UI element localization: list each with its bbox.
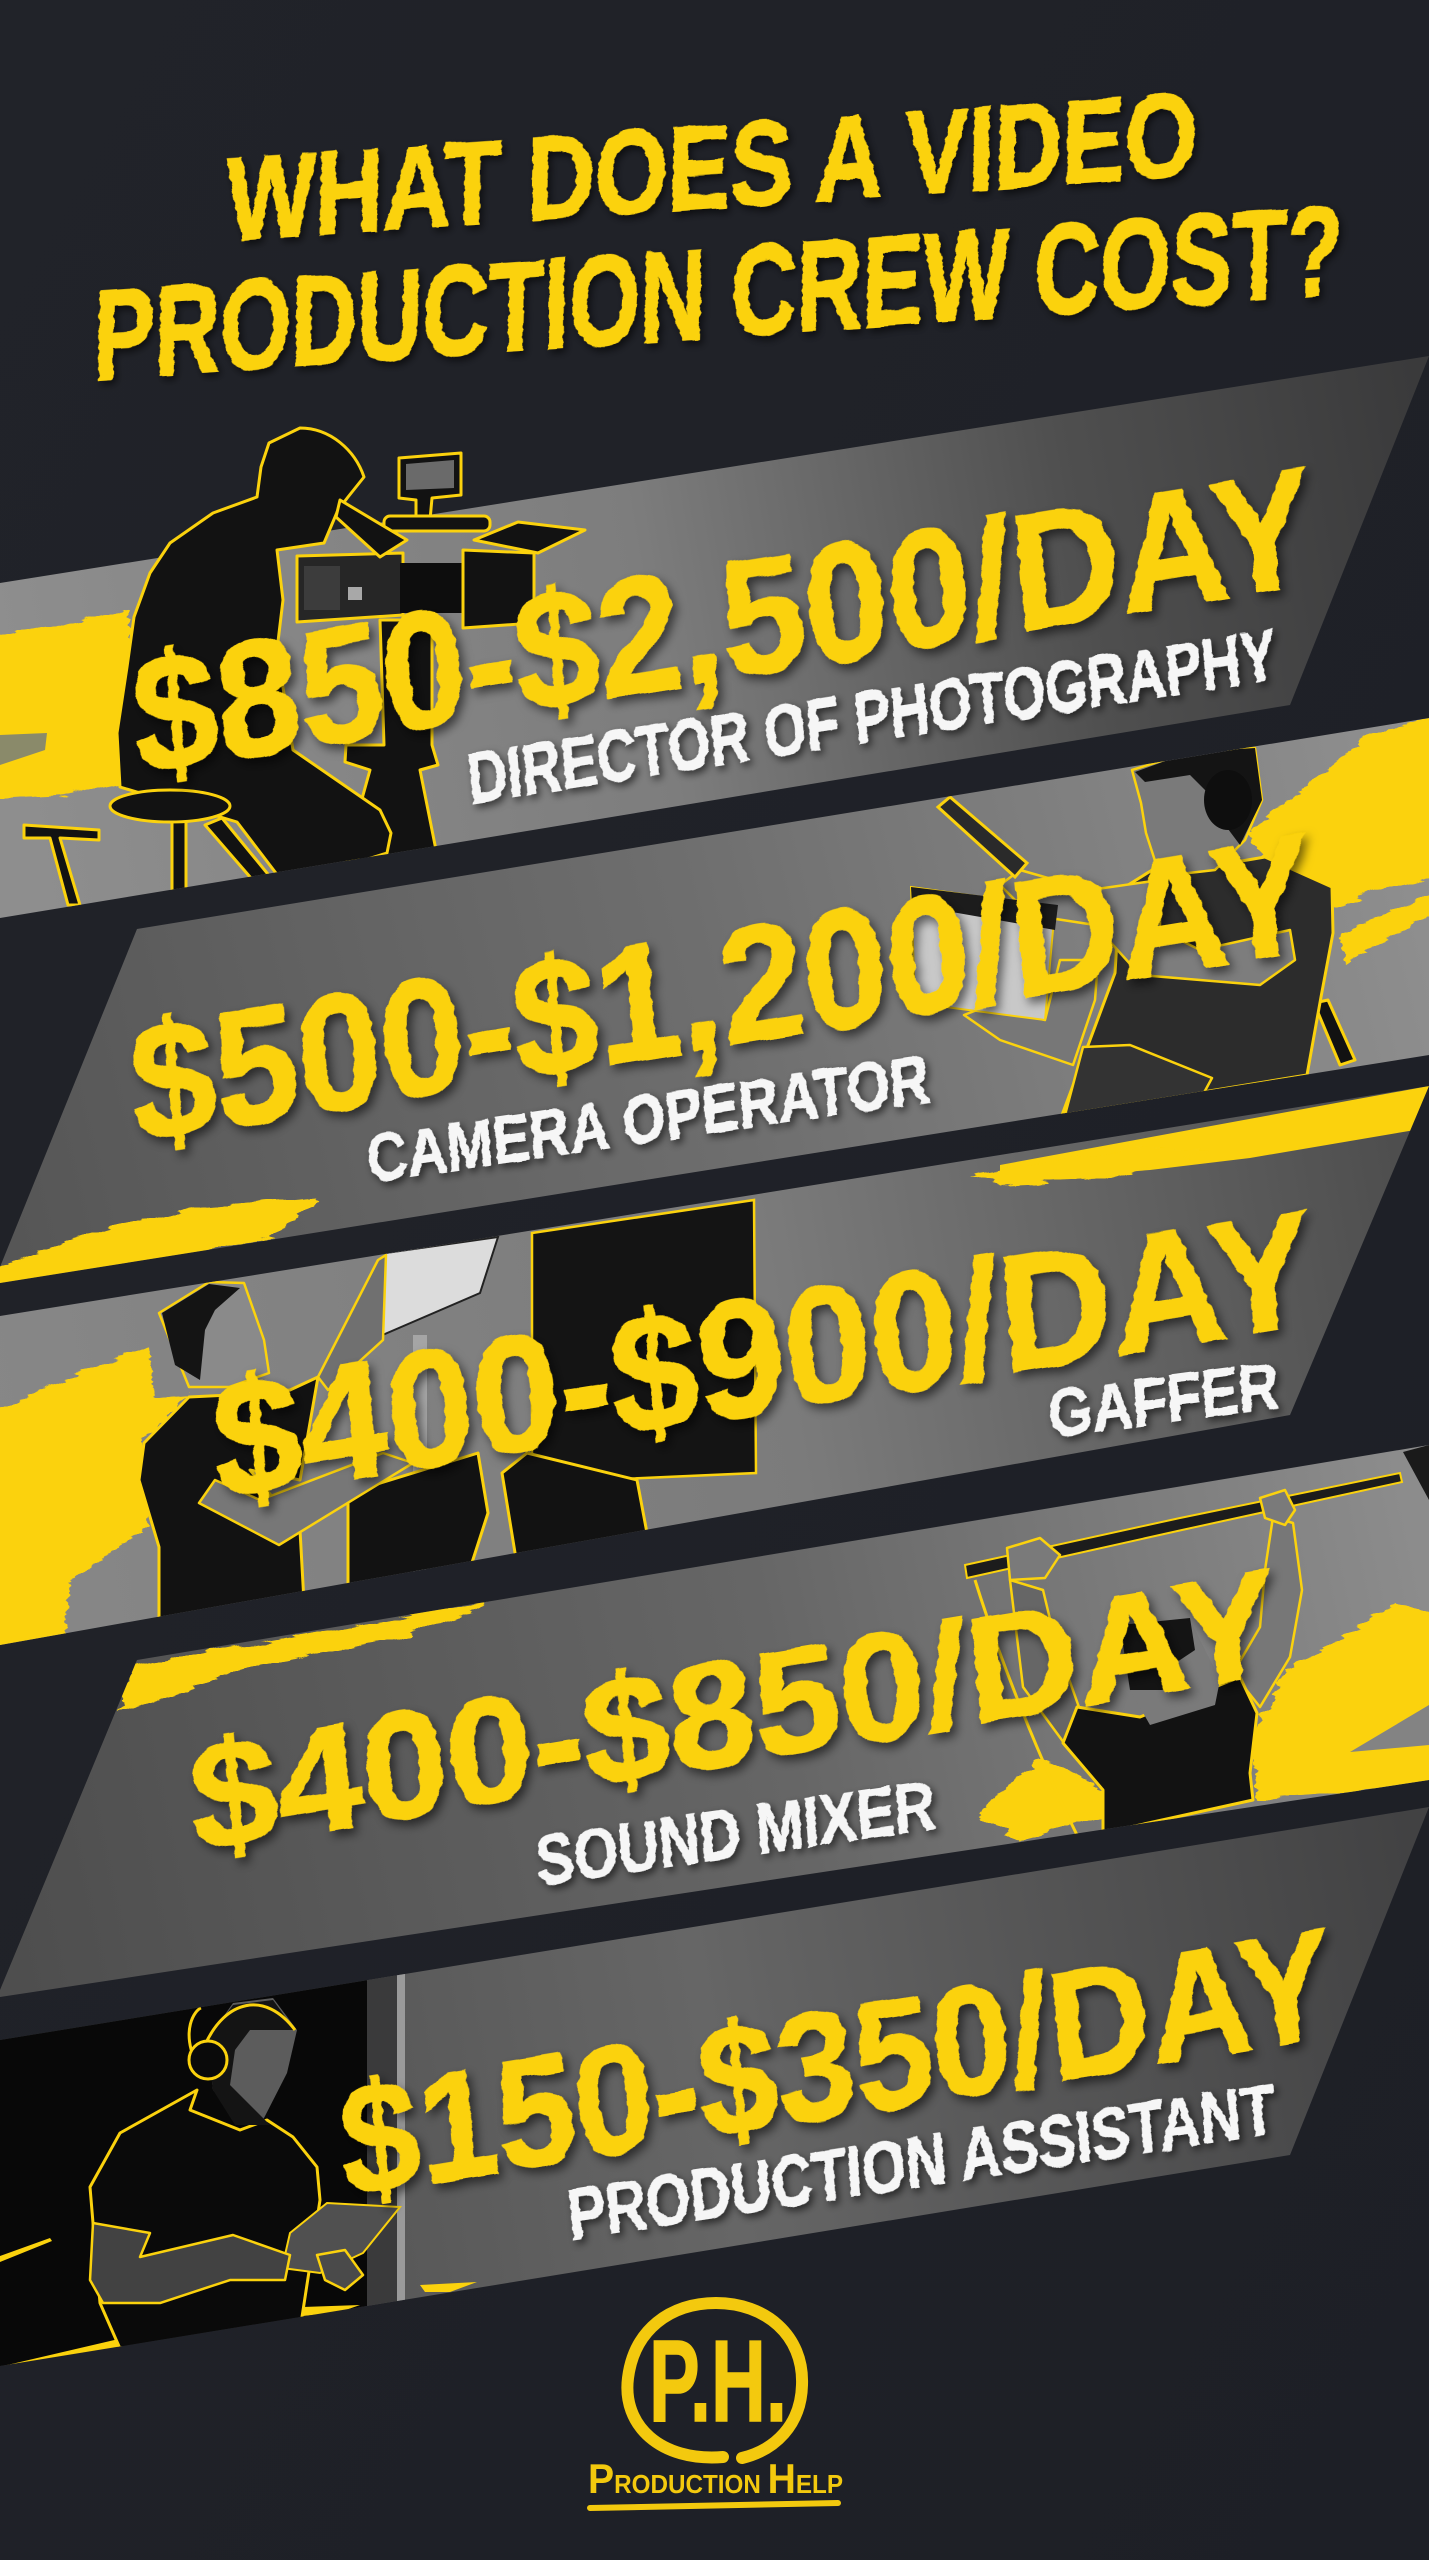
boom pole: [965, 1473, 1402, 1578]
logo ring: [627, 2303, 802, 2458]
yellow brush strokes: [0, 1086, 1429, 1650]
crew member 2: [348, 1453, 488, 1600]
operator silhouette: [117, 428, 391, 885]
yellow brush flecks: [0, 2238, 477, 2368]
top handle: [384, 516, 490, 531]
monitor: [399, 453, 461, 520]
black flag: [532, 1200, 756, 1483]
cable: [975, 1580, 1077, 1835]
panel: camera operator: [0, 712, 1429, 1290]
price: $400-$900/DAY: [206, 1175, 1321, 1536]
torso: [1063, 1677, 1257, 1833]
price: $850-$2,500/DAY: [125, 434, 1321, 811]
headphones: [1204, 770, 1252, 830]
microphone: [1403, 1445, 1429, 1500]
panel: gaffer: [0, 1086, 1429, 1650]
viewfinder: [336, 500, 407, 557]
headphones: [189, 2005, 295, 2079]
role label: SOUND MIXER: [533, 1766, 938, 1901]
right hand: [317, 2250, 363, 2290]
equipment bag: [1065, 1045, 1212, 1115]
hair: [162, 1284, 240, 1380]
title line 1: WHAT DOES A VIDEO: [225, 69, 1199, 267]
yellow brush stroke: [0, 608, 130, 800]
torso: [90, 2090, 320, 2360]
price: $500-$1,200/DAY: [123, 800, 1320, 1179]
lower arm and slate: [911, 797, 1098, 1065]
price: $400-$850/DAY: [183, 1538, 1284, 1884]
head: [1132, 748, 1262, 875]
panel background: [0, 356, 1429, 918]
logo wordmark: PRODUCTION HELP: [588, 2455, 843, 2502]
panel: production assistant: [0, 1807, 1429, 2380]
matte box: [463, 522, 585, 628]
price: $150-$350/DAY: [333, 1896, 1339, 2230]
forearm: [1000, 870, 1295, 985]
role label: CAMERA OPERATOR: [364, 1040, 932, 1198]
role label: GAFFER: [1046, 1347, 1281, 1453]
logo underline: [590, 2503, 838, 2508]
gaffer torso: [139, 1377, 318, 1640]
photo: gaffer with softbox: [139, 1200, 756, 1640]
dark backdrop: [0, 1960, 405, 2380]
stand: [413, 1335, 427, 1580]
panel: sound mixer: [0, 1445, 1429, 1997]
panel background: [0, 718, 1429, 1283]
photo: operator with slate: [911, 748, 1355, 1115]
camera body: [297, 553, 403, 622]
raised arm: [318, 1255, 386, 1390]
right arm: [1233, 1517, 1302, 1707]
panel background: [0, 1445, 1429, 1997]
forearm: [199, 1453, 413, 1545]
yellow brush strokes: [120, 1600, 1429, 1840]
hair: [1135, 748, 1262, 845]
head: [207, 1998, 297, 2125]
photo: assistant with tablet: [90, 1998, 400, 2360]
light stand: [24, 825, 99, 905]
hands: [1007, 1490, 1295, 1580]
logo initials: P.H.: [649, 2316, 787, 2446]
panel background: [0, 1807, 1429, 2366]
title: [92, 69, 1344, 408]
lens: [400, 563, 468, 613]
head: [1120, 1618, 1220, 1725]
strap bar: [1314, 1000, 1355, 1065]
left arm: [1010, 1580, 1080, 1747]
softbox: [378, 1237, 498, 1337]
crew member 3: [502, 1453, 647, 1565]
photo: camera operator seated: [24, 428, 585, 905]
forearm: [90, 2223, 290, 2303]
logo: production help: [588, 2303, 843, 2508]
tripod: [345, 620, 438, 860]
yellow brush strokes: [0, 712, 1429, 1290]
tablet: [282, 2203, 400, 2273]
panel background: [0, 1086, 1429, 1645]
stool: [108, 788, 270, 890]
photo: boom operator: [965, 1445, 1429, 1835]
panel: director of photography: [0, 356, 1429, 918]
head: [159, 1282, 269, 1387]
hair and beard: [207, 2000, 295, 2125]
torso: [1062, 857, 1333, 1115]
